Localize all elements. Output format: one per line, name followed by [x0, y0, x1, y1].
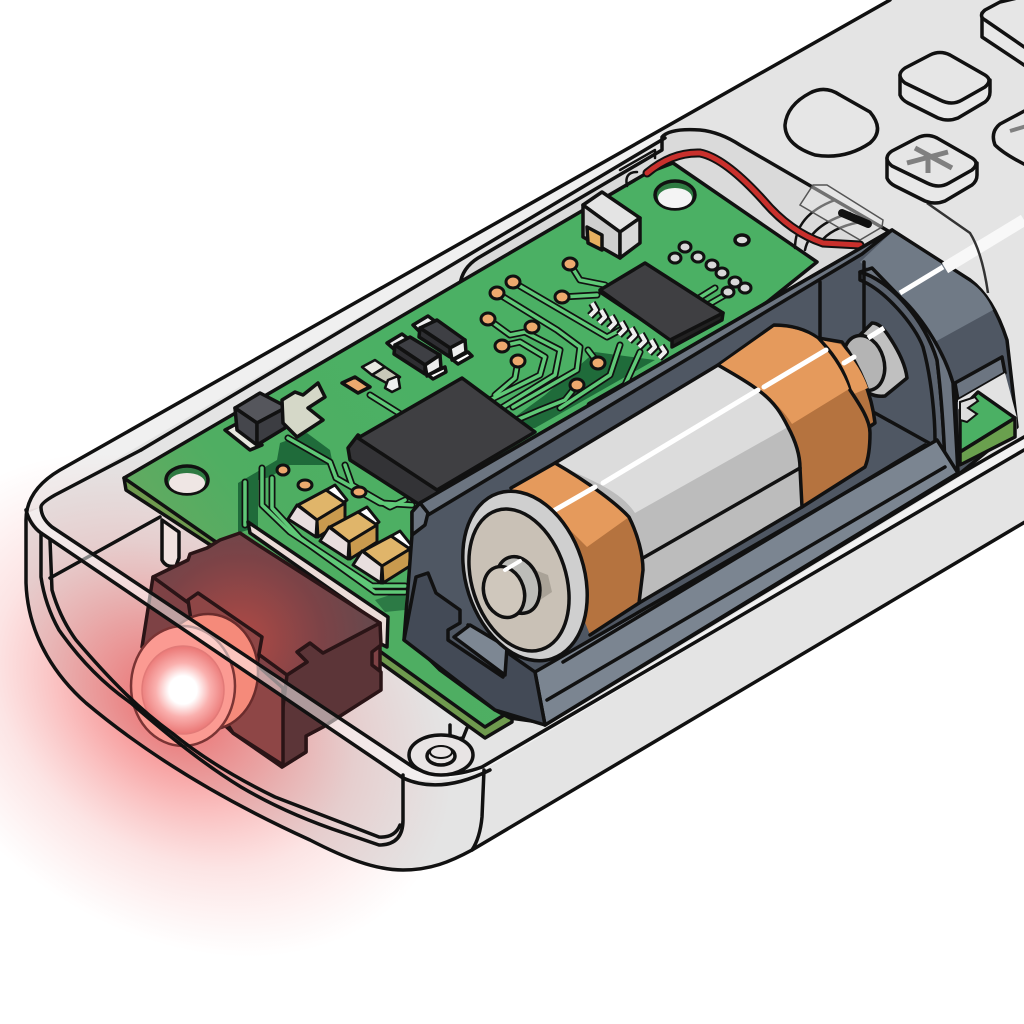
red glow: [0, 430, 560, 1024]
block front shroud: [188, 593, 283, 765]
nub highlight: [868, 328, 884, 338]
battery terminal nub: [837, 323, 907, 396]
lower rail: [535, 440, 958, 725]
main chip: [348, 378, 535, 505]
via dot: [735, 235, 749, 245]
small diode: [362, 360, 400, 392]
red wire: [647, 153, 860, 245]
battery far band: [718, 325, 870, 507]
battery near band: [511, 463, 643, 635]
screw boss: [409, 735, 473, 775]
battery front face: [442, 475, 608, 677]
LED lens: [142, 646, 224, 734]
small clip by wire: [620, 150, 655, 186]
orange solder pads: [277, 258, 605, 497]
board surface: [124, 163, 817, 727]
rim band: [28, 438, 1024, 781]
LED front ring: [131, 626, 235, 746]
LED lamp: [131, 614, 258, 746]
LED barrel: [158, 614, 258, 730]
battery highlights: [555, 350, 854, 510]
board edge: [124, 478, 512, 738]
battery contact coil and tape: [795, 185, 883, 250]
cap outer arc band: [860, 268, 958, 475]
cap highlight: [900, 267, 943, 293]
capacitor 3: [353, 531, 412, 583]
body front seam: [472, 770, 484, 850]
capacitor row: [288, 485, 412, 583]
lens outline: [41, 533, 403, 845]
round button: [785, 89, 878, 156]
translucent case rim: [26, 138, 1024, 850]
recess curve right: [927, 203, 988, 293]
second chip with pins: [590, 263, 723, 358]
cap inner arc band: [860, 272, 945, 470]
light metal tab: [282, 383, 325, 437]
front frame notch: [404, 573, 545, 725]
battery shoulder: [818, 338, 875, 450]
square button: [900, 52, 990, 120]
battery: [442, 323, 907, 677]
interior lines: [820, 262, 929, 443]
case back wall lines: [50, 517, 160, 578]
top right button: [982, 0, 1024, 69]
grey solder pads: [669, 242, 751, 297]
star glyph: [907, 148, 952, 173]
window with board: [955, 357, 1017, 473]
front frame light piece: [454, 625, 507, 675]
dark copper areas: [238, 352, 655, 612]
sensor cube: [583, 192, 640, 258]
block bottom: [142, 577, 380, 767]
block top: [153, 533, 380, 675]
LED housing block: [142, 533, 381, 767]
holder main body: [404, 230, 1017, 725]
board pin left: [162, 520, 179, 566]
white connector strip: [248, 522, 388, 647]
button mark: [1010, 125, 1024, 131]
front corner: [412, 503, 428, 535]
upper rim strip: [28, 130, 665, 510]
board pin right: [450, 725, 467, 739]
transistor two: [413, 316, 472, 364]
orange chip pad: [342, 377, 370, 393]
capacitor 2: [320, 507, 379, 559]
recess behind circuit board: [460, 130, 890, 340]
block shade right: [282, 623, 381, 767]
right middle button: [993, 108, 1024, 167]
star button: [887, 136, 977, 203]
small black component: [225, 393, 287, 450]
chip pins: [590, 303, 665, 358]
circuit board: [124, 163, 817, 738]
mounting hole top: [655, 181, 695, 209]
mounting hole left: [166, 466, 208, 494]
holder top rail: [420, 230, 892, 515]
battery holder: [404, 230, 1017, 725]
body streak highlight: [945, 220, 1024, 268]
transistor one: [387, 334, 446, 379]
traces: [245, 264, 725, 592]
capacitor 1: [288, 485, 347, 537]
battery silver body: [555, 365, 802, 603]
rim lines: [41, 450, 1024, 774]
holder cap upper face: [860, 232, 993, 343]
